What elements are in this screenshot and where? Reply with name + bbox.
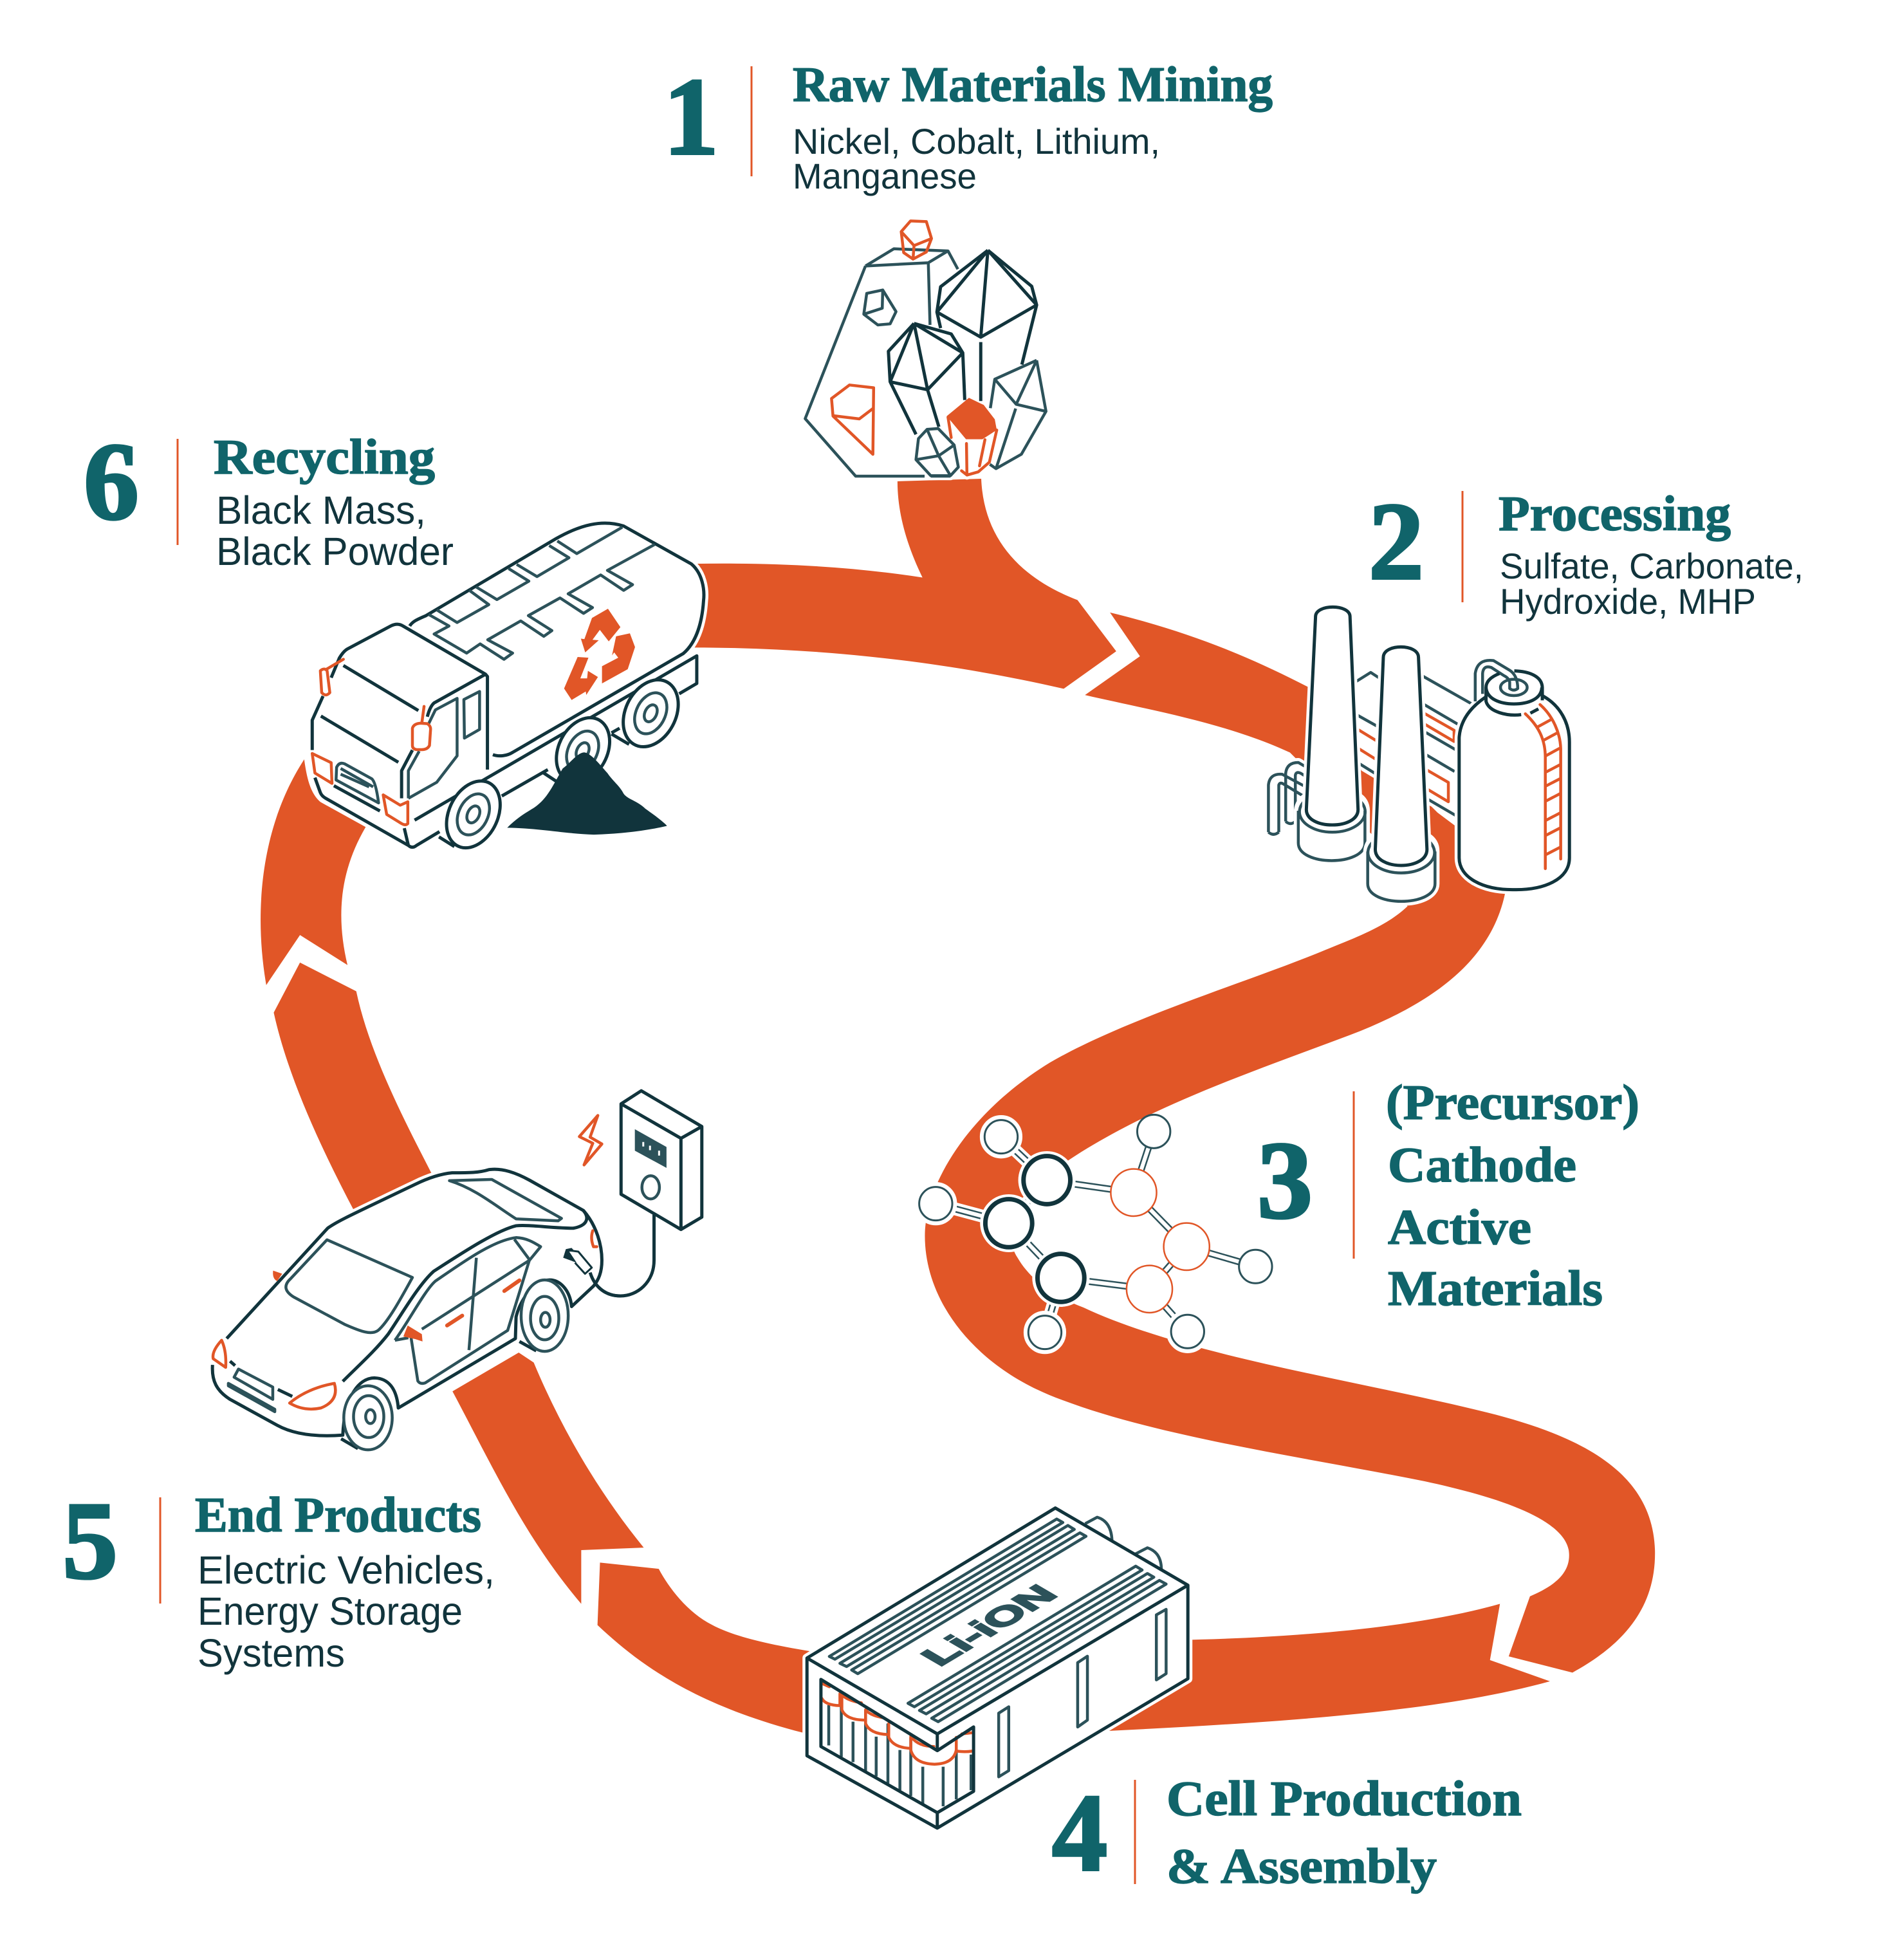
icon: raw material crystals: [805, 221, 1046, 476]
ribbon segment: end products to recycling upper: [261, 756, 375, 985]
label: step 5: Systems: [198, 1631, 345, 1675]
label: step 5: Electric Vehicles,: [198, 1548, 495, 1592]
battery label: Li-iON: [913, 1580, 1065, 1671]
icon: recycling truck with black powder: [308, 523, 704, 854]
ribbon segment: cell production to end products: [598, 1562, 818, 1735]
label: step 1: Raw Materials Mining: [793, 57, 1273, 112]
label: step 2: [1369, 481, 1803, 622]
label: step 1: Nickel, Cobalt, Lithium,: [793, 121, 1160, 162]
label: step 6: 6: [84, 421, 139, 543]
label: step 2: 2: [1369, 481, 1424, 603]
ribbon segment: cell production out: [1100, 1604, 1550, 1732]
icon: molecule: [919, 1114, 1272, 1349]
label: step 3: 3: [1257, 1120, 1313, 1242]
label: step 2: Sulfate, Carbonate,: [1500, 546, 1803, 586]
label: step 3: Cathode: [1388, 1137, 1576, 1192]
process ribbon: [261, 479, 1655, 1735]
ribbon segment: towards end products: [452, 1353, 643, 1604]
label: step 1: Manganese: [793, 156, 977, 196]
label: step 4: & Assembly: [1167, 1838, 1437, 1894]
label: step 3: Active: [1388, 1199, 1531, 1255]
label: step 5: Energy Storage: [198, 1589, 463, 1633]
label: step 4: 4: [1052, 1772, 1107, 1894]
label: step 3: (Precursor): [1386, 1075, 1639, 1130]
label: step 5: [62, 1480, 495, 1675]
ribbon segment: mining and recycling to processing: [694, 479, 1116, 689]
icon: processing plant: [1268, 607, 1569, 901]
label: step 4: [1052, 1771, 1522, 1894]
label: step 6: Recycling: [214, 429, 435, 485]
icon: electric car with charger: [212, 1091, 702, 1450]
label: step 6: Black Mass,: [216, 488, 426, 532]
label: step 3: Materials: [1388, 1261, 1603, 1316]
label: step 3: [1257, 1075, 1639, 1316]
label: step 1: [663, 56, 1273, 196]
label: step 1: 1: [663, 56, 719, 178]
label: step 4: Cell Production: [1167, 1771, 1522, 1826]
label: step 5: 5: [62, 1480, 118, 1602]
label: step 6: [84, 421, 454, 573]
label: step 2: Hydroxide, MHP: [1500, 581, 1756, 622]
icon: lithium-ion battery: [807, 1508, 1188, 1828]
label: step 5: End Products: [195, 1487, 481, 1542]
label: step 2: Processing: [1499, 486, 1731, 541]
ribbon segment: processing through cathode materials to cell production: [925, 613, 1655, 1672]
ribbon segment: end products to recycling lower: [273, 963, 434, 1212]
label: step 6: Black Powder: [216, 530, 454, 573]
